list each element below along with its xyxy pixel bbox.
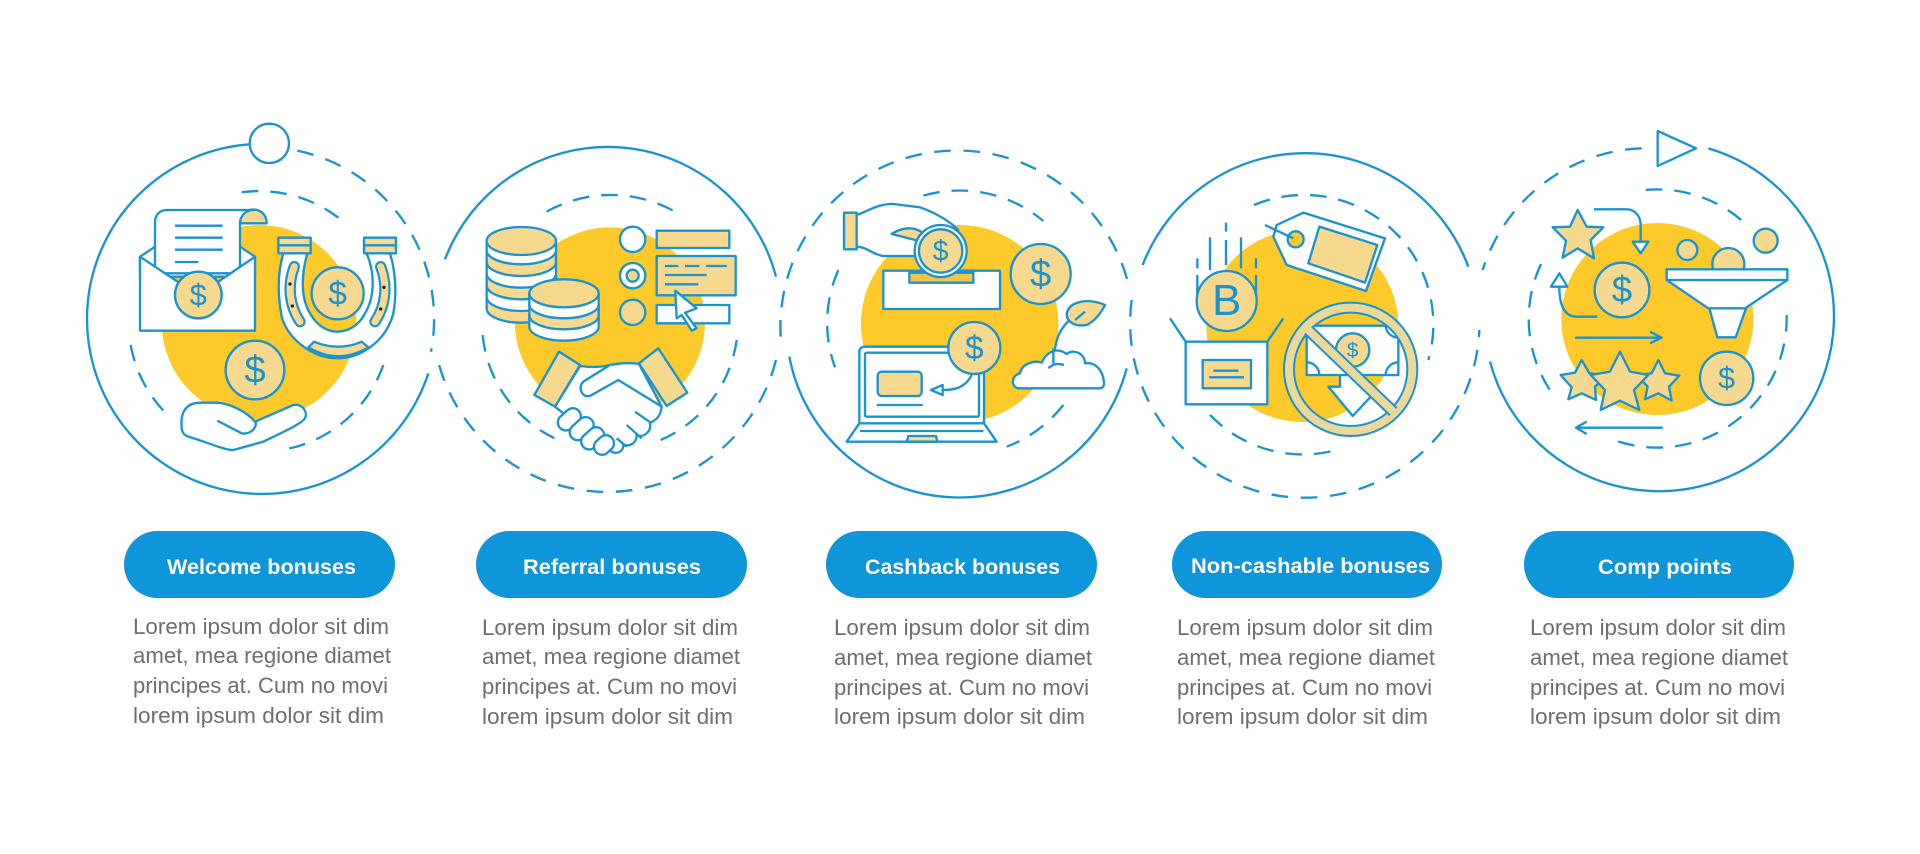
icon: three stars	[1561, 352, 1679, 410]
icon: laptop with coin	[847, 322, 1000, 442]
icon: exchange arrows	[1575, 332, 1663, 434]
icon: laptop with coin: $	[965, 330, 984, 367]
body text: referral bonuses	[482, 615, 740, 729]
illustration: referral bonuses	[439, 147, 776, 492]
icon: hand dropping coin into slot: $	[933, 235, 949, 267]
heading pill: referral bonuses	[476, 531, 747, 598]
heading pill: welcome bonuses	[124, 531, 395, 598]
body text: referral bonuses: principes at. Cum no movi	[482, 674, 737, 699]
body text: non-cashable bonuses: principes at. Cum no movi	[1177, 675, 1432, 700]
icon: hand holding coin	[181, 341, 306, 450]
icon: funnel with coins: $	[1718, 362, 1735, 396]
icon: small coin stack	[529, 279, 599, 341]
body text: comp points: principes at. Cum no movi	[1530, 675, 1785, 700]
body text: non-cashable bonuses: lorem ipsum dolor sit dim	[1177, 704, 1428, 729]
body text: referral bonuses: lorem ipsum dolor sit dim	[482, 704, 733, 729]
heading pill: welcome bonuses: Welcome bonuses	[167, 556, 356, 579]
illustration: welcome bonuses	[87, 124, 434, 494]
body text: comp points: lorem ipsum dolor sit dim	[1530, 704, 1781, 729]
panel: comp points	[1483, 131, 1834, 729]
icon: horseshoe with coin: $	[328, 275, 347, 312]
body text: cashback bonuses: amet, mea regione diamet	[834, 645, 1092, 670]
icon: envelope with letter	[140, 210, 267, 331]
panel: welcome bonuses	[87, 124, 434, 728]
body text: cashback bonuses: lorem ipsum dolor sit dim	[834, 704, 1085, 729]
icon: prohibited cash withdrawal	[1289, 308, 1412, 431]
body text: non-cashable bonuses: Lorem ipsum dolor sit dim	[1177, 615, 1433, 640]
heading pill: referral bonuses: Referral bonuses	[523, 556, 701, 579]
panel: non-cashable bonuses	[1130, 153, 1479, 729]
icon: large coin stack	[487, 227, 556, 323]
icon: price tag	[1265, 213, 1385, 291]
icon: bonus coin falling into box	[1170, 223, 1283, 404]
body text: referral bonuses: Lorem ipsum dolor sit dim	[482, 615, 738, 640]
icon: prohibited cash withdrawal: $	[1347, 339, 1359, 362]
icon: hand holding coin: $	[244, 349, 266, 392]
icon: form with radio buttons and cursor	[620, 227, 736, 331]
body text: welcome bonuses: lorem ipsum dolor sit dim	[133, 703, 384, 728]
body text: comp points: amet, mea regione diamet	[1530, 645, 1788, 670]
icon: funnel with coins	[1667, 229, 1787, 405]
body text: welcome bonuses	[133, 614, 391, 728]
panel: cashback bonuses	[780, 150, 1127, 729]
body text: welcome bonuses: amet, mea regione diamet	[133, 643, 391, 668]
icon: bonus coin falling into box: B	[1212, 276, 1241, 325]
body text: comp points: Lorem ipsum dolor sit dim	[1530, 615, 1786, 640]
icon: handshake	[534, 348, 687, 458]
body text: cashback bonuses	[834, 615, 1092, 729]
panel: referral bonuses	[439, 147, 776, 729]
heading pill: cashback bonuses	[826, 531, 1097, 598]
illustration: non-cashable bonuses	[1130, 153, 1479, 498]
heading pill: comp points	[1524, 531, 1794, 598]
body text: cashback bonuses: Lorem ipsum dolor sit dim	[834, 615, 1090, 640]
icon: money plant on cloud	[1011, 244, 1105, 388]
heading pill: cashback bonuses: Cashback bonuses	[865, 556, 1060, 579]
body text: non-cashable bonuses: amet, mea regione diamet	[1177, 645, 1435, 670]
body text: welcome bonuses: Lorem ipsum dolor sit dim	[133, 614, 389, 639]
body text: comp points	[1530, 615, 1788, 729]
body text: referral bonuses: amet, mea regione diamet	[482, 644, 740, 669]
body text: non-cashable bonuses	[1177, 615, 1435, 729]
illustration: comp points	[1483, 131, 1834, 491]
body text: welcome bonuses: principes at. Cum no movi	[133, 673, 388, 698]
heading pill: non-cashable bonuses: Non-cashable bonuses	[1191, 555, 1430, 578]
heading pill: non-cashable bonuses	[1172, 531, 1442, 598]
heading pill: comp points: Comp points	[1598, 556, 1732, 579]
icon: hand dropping coin into slot	[844, 204, 1000, 309]
icon: money plant on cloud: $	[1030, 253, 1051, 296]
illustration: cashback bonuses	[780, 150, 1127, 497]
icon: horseshoe with coin	[278, 238, 396, 358]
icon: star and coin conversion cycle: $	[1612, 269, 1632, 310]
icon: star and coin conversion cycle	[1551, 209, 1649, 317]
icon: envelope with letter: $	[190, 278, 207, 312]
body text: cashback bonuses: principes at. Cum no movi	[834, 675, 1089, 700]
